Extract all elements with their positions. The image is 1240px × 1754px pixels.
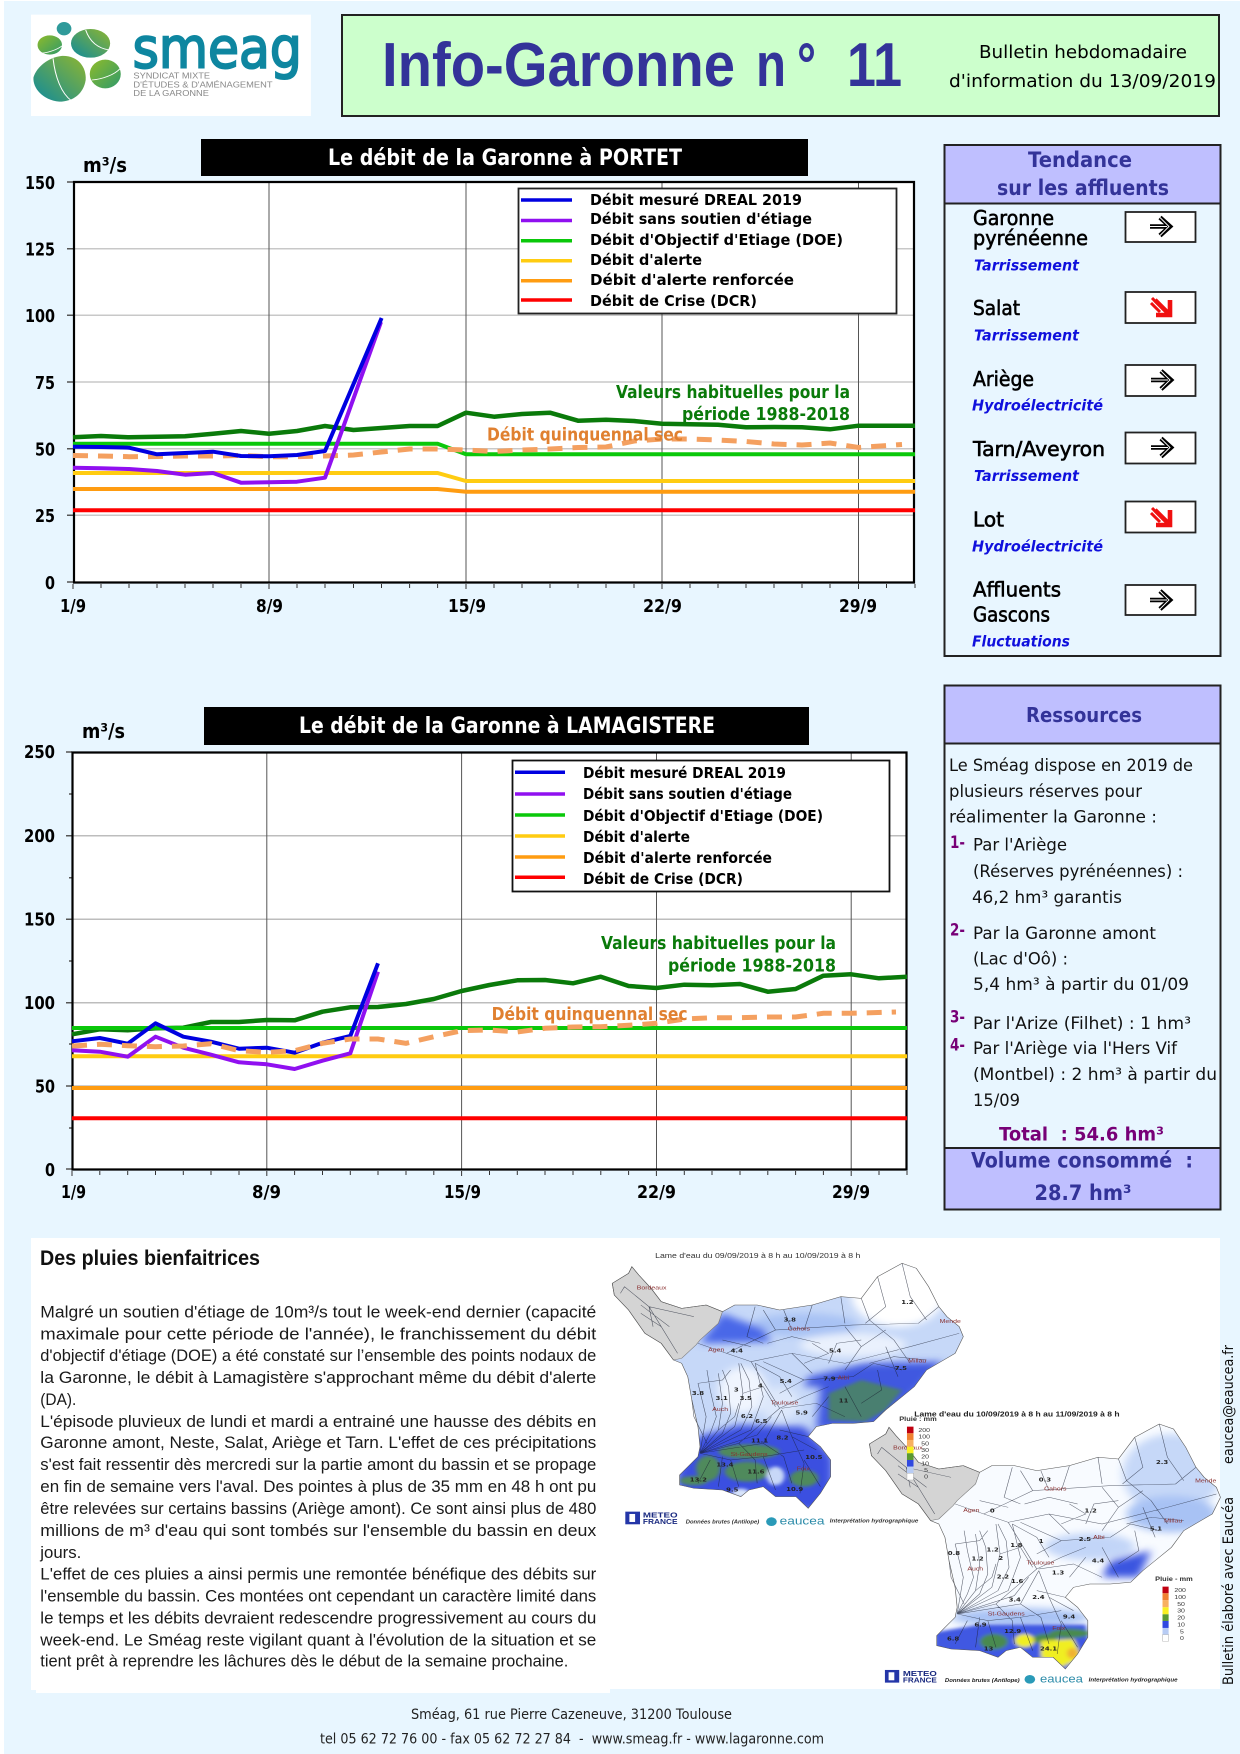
y axis labels: 50 xyxy=(35,1076,55,1098)
title: Info-Garonne xyxy=(382,31,735,100)
item 2: Par la Garonne amont xyxy=(973,924,1156,944)
x axis labels: 1/9 xyxy=(60,596,86,617)
map: 10/09 to 11/09: Auch xyxy=(967,1566,984,1572)
chart annotations: période 1988-2018 xyxy=(682,404,850,425)
chart title bar xyxy=(204,707,809,745)
map: 10/09 to 11/09: Lame d'eau du 10/09/2019 à 8 h au 11/09/2019 à 8 h xyxy=(914,1410,1120,1418)
article text xyxy=(39,1303,597,1671)
map: 09/09 to 10/09: 3.8 xyxy=(692,1391,705,1397)
chart title bar: Le débit de la Garonne à PORTET xyxy=(328,146,682,171)
rain legend, first map: Pluie : mm xyxy=(899,1415,937,1423)
header panel xyxy=(342,15,1219,116)
article text: le temps et les débits devraient redescendre progressivement au cours du xyxy=(40,1610,596,1628)
y axis labels: 200 xyxy=(24,826,55,847)
chart annotations: période 1988-2018 xyxy=(668,956,836,977)
map: 10/09 to 11/09: Millau xyxy=(1164,1518,1183,1524)
map credits: eaucea xyxy=(1040,1673,1083,1685)
x axis labels: 8/9 xyxy=(252,1182,281,1203)
map: 09/09 to 10/09: 10.5 xyxy=(805,1455,822,1461)
article text: Malgré un soutien d'étiage de 10m³/s tout le week-end dernier (capacité xyxy=(40,1303,596,1321)
y axis labels: 100 xyxy=(25,306,55,327)
line: débit quinquennal sec xyxy=(73,439,902,457)
y axis labels: 50 xyxy=(35,440,55,460)
x axis labels xyxy=(60,596,877,617)
intro text xyxy=(949,756,1193,828)
line: DOE xyxy=(73,444,915,454)
row: Salat: Salat xyxy=(973,296,1020,320)
maps: lames d'eau xyxy=(612,1252,1220,1685)
line: débit sans soutien xyxy=(73,322,381,483)
map: 09/09 to 10/09: 8.2 xyxy=(776,1435,789,1441)
map: 10/09 to 11/09: Mende xyxy=(1195,1478,1217,1484)
panel heading: sur les affluents xyxy=(997,176,1169,200)
row: Lot: Lot xyxy=(973,508,1004,532)
item 4: Par l'Ariège via l'Hers Vif xyxy=(973,1039,1178,1059)
line: débit de crise xyxy=(72,1116,907,1120)
line: débit quinquennal sec xyxy=(72,1012,896,1052)
chart annotations xyxy=(487,382,850,446)
map: 10/09 to 11/09: 1 xyxy=(1039,1538,1044,1545)
legend: Débit d'alerte renforcée xyxy=(590,271,794,289)
article text: tient prêt à reprendre les lâchures dès le début de la semaine prochaine. xyxy=(40,1653,568,1671)
rain legend, first map: 200 xyxy=(918,1428,930,1434)
map: 10/09 to 11/09: 2.2 xyxy=(997,1574,1009,1580)
row: Garonne pyrénéenne: Garonne xyxy=(973,206,1054,230)
map: 09/09 to 10/09: 3.1 xyxy=(716,1396,728,1402)
map: 09/09 to 10/09: 5.4 xyxy=(780,1379,793,1385)
map: 10/09 to 11/09: 3.4 xyxy=(1009,1597,1022,1603)
line: débit mesuré xyxy=(72,963,378,1053)
map credits xyxy=(625,1510,919,1527)
map: 10/09 to 11/09: 12.9 xyxy=(1004,1628,1021,1635)
map: 09/09 to 10/09: Millau xyxy=(908,1358,927,1364)
y axis labels: 150 xyxy=(24,910,55,930)
map: 09/09 to 10/09: 3.8 xyxy=(784,1317,797,1323)
row: Ariège: Ariège xyxy=(973,367,1034,391)
legend: Débit sans soutien d'étiage xyxy=(583,785,792,803)
map: 10/09 to 11/09: Toulouse xyxy=(1027,1560,1055,1566)
map: 10/09 to 11/09: 4.4 xyxy=(1092,1558,1105,1564)
item 4 xyxy=(950,1036,1217,1111)
article heading: Des pluies bienfaitrices xyxy=(40,1247,260,1270)
map: 10/09 to 11/09: 24.1 xyxy=(1040,1646,1057,1652)
row: Lot: Hydroélectricité xyxy=(972,538,1103,556)
logo subtitle xyxy=(133,72,273,98)
line: débit d'alerte xyxy=(72,1054,907,1058)
intro text: plusieurs réserves pour xyxy=(949,782,1142,802)
map credits: METEO xyxy=(903,1669,937,1678)
legend: Débit de Crise (DCR) xyxy=(583,870,743,888)
chart annotations: Débit quinquennal sec xyxy=(487,425,683,446)
map: 10/09 to 11/09: 0.8 xyxy=(948,1550,961,1557)
line: valeurs habituelles xyxy=(72,974,907,1034)
legend: Débit d'Objectif d'Etiage (DOE) xyxy=(590,231,843,249)
row: Salat xyxy=(973,292,1196,345)
article text: millions de m³ d'eau qui sont tombés sur l'ensemble du bassin en deux xyxy=(40,1522,597,1540)
y axis labels: 0 xyxy=(45,573,55,594)
rain legend, second map: 20 xyxy=(1177,1615,1185,1621)
panel heading: Tendance xyxy=(1028,148,1132,172)
x axis labels: 22/9 xyxy=(643,596,682,617)
map: 09/09 to 10/09: 11.6 xyxy=(747,1469,765,1475)
map: 09/09 to 10/09: Bordeaux xyxy=(637,1285,667,1291)
title: ° xyxy=(797,31,816,100)
row: Affluents Gascons: Gascons xyxy=(973,603,1050,627)
intro text: Le Sméag dispose en 2019 de xyxy=(949,756,1193,776)
map credits xyxy=(885,1669,1178,1685)
panel heading: Ressources xyxy=(1026,703,1142,727)
article text: la Garonne, le débit à Lamagistère s'approchant même du débit d'alerte xyxy=(40,1369,596,1387)
rain legend, second map: 30 xyxy=(1177,1608,1185,1614)
rain legend, first map: 20 xyxy=(921,1454,929,1460)
article text: L'effet de ces pluies a ainsi permis une remontée bénéfique des débits sur xyxy=(40,1566,597,1584)
line: valeurs habituelles xyxy=(73,413,915,437)
rain legend, first map: 5 xyxy=(924,1468,928,1474)
item 2: 2- xyxy=(950,920,965,940)
logo wordmark: smeag xyxy=(133,16,302,81)
chart title bar xyxy=(201,139,808,176)
map: 09/09 to 10/09: Foix xyxy=(797,1466,811,1472)
y axis unit: m³/s xyxy=(83,153,127,177)
row: Ariège xyxy=(972,365,1196,415)
chart annotations: Valeurs habituelles pour la xyxy=(601,933,836,954)
item 4: (Montbel) : 2 hm³ à partir du xyxy=(973,1065,1217,1085)
x axis labels: 15/9 xyxy=(448,596,486,617)
map: 09/09 to 10/09: 6.2 xyxy=(741,1414,753,1420)
map: 10/09 to 11/09: 0 xyxy=(990,1508,995,1514)
line: débit sans soutien xyxy=(72,972,378,1069)
map: 10/09 to 11/09: 1.2 xyxy=(971,1556,984,1562)
plot area xyxy=(66,752,907,1176)
logo subtitle: DE LA GARONNE xyxy=(133,89,209,98)
x axis labels: 8/9 xyxy=(256,596,283,617)
item 1: 46,2 hm³ garantis xyxy=(972,888,1122,908)
article text: maximale pour cette période de l'année), le franchissement du débit xyxy=(40,1325,597,1343)
item 2 xyxy=(950,920,1189,995)
map: 10/09 to 11/09: 9.4 xyxy=(1063,1614,1076,1620)
legend: Débit mesuré DREAL 2019 xyxy=(583,764,786,782)
legend: Débit de Crise (DCR) xyxy=(590,292,757,310)
article text: L'épisode pluvieux de lundi et mardi a entrainé une hausse des débits en xyxy=(40,1413,596,1431)
article text: week-end. Le Sméag reste vigilant quant à l'évolution de la situation et se xyxy=(39,1632,596,1650)
item 2: 5,4 hm³ à partir du 01/09 xyxy=(973,975,1189,995)
map credits: Interprétation hydrographique xyxy=(830,1519,919,1524)
map: 09/09 to 10/09: Agen xyxy=(708,1347,725,1353)
x axis labels: 15/9 xyxy=(444,1182,481,1203)
map: 10/09 to 11/09: 6.9 xyxy=(974,1622,987,1628)
item 2: (Lac d'Oô) : xyxy=(973,950,1068,970)
vertical credit: eaucea email: eaucea@eaucea.fr xyxy=(1221,1345,1237,1464)
map: 09/09 to 10/09: 9.5 xyxy=(726,1487,738,1493)
map: 09/09 to 10/09: 11 xyxy=(839,1398,848,1404)
legend: Débit d'alerte xyxy=(583,828,690,846)
rain legend, first map xyxy=(899,1415,937,1480)
map: 10/09 to 11/09: 2.5 xyxy=(1079,1536,1091,1543)
row: Affluents Gascons: Affluents xyxy=(973,578,1061,602)
y axis labels xyxy=(25,173,55,594)
rain legend, second map: 50 xyxy=(1177,1601,1185,1608)
map: 09/09 to 10/09: 1.2 xyxy=(901,1300,914,1306)
row: Lot xyxy=(972,502,1196,556)
rain legend, second map: 5 xyxy=(1180,1629,1184,1635)
y axis labels: 0 xyxy=(45,1160,55,1181)
map credits: Données brutes (Antilope) xyxy=(686,1520,759,1525)
x axis labels xyxy=(61,1182,870,1203)
x axis labels: 22/9 xyxy=(637,1182,676,1203)
map: 10/09 to 11/09: Cahors xyxy=(1044,1486,1066,1492)
row: Garonne pyrénéenne: pyrénéenne xyxy=(973,226,1088,250)
legend: Débit d'alerte xyxy=(590,251,702,269)
map: 09/09 to 10/09: 3 xyxy=(734,1387,739,1393)
map: 10/09 to 11/09: 5.1 xyxy=(1150,1526,1162,1532)
map: 09/09 to 10/09: Mende xyxy=(940,1319,961,1325)
map: 10/09 to 11/09: Agen xyxy=(963,1507,980,1514)
map: 09/09 to 10/09: 10.9 xyxy=(786,1487,803,1493)
subtitle: Bulletin hebdomadaire xyxy=(979,42,1187,63)
map: 09/09 to 10/09: 4 xyxy=(758,1383,763,1389)
map: 09/09 to 10/09: 11.1 xyxy=(751,1438,768,1444)
item 1: (Réserves pyrénéennes) : xyxy=(973,862,1183,882)
chart annotations xyxy=(492,933,836,1025)
map: 10/09 to 11/09: Albi xyxy=(1093,1534,1105,1541)
item 4: 15/09 xyxy=(973,1091,1020,1111)
map: 09/09 to 10/09: 13.4 xyxy=(716,1462,734,1468)
map: 10/09 to 11/09: 1.2 xyxy=(1085,1508,1097,1514)
article text: jours. xyxy=(39,1544,81,1562)
subtitle: d'information du 13/09/2019 xyxy=(949,71,1216,92)
row: Tarn/Aveyron: Tarrissement xyxy=(974,467,1080,485)
map credits: FRANCE xyxy=(903,1675,937,1684)
map: 10/09 to 11/09: 1.6 xyxy=(1011,1578,1024,1585)
y axis labels: 250 xyxy=(24,742,55,763)
map credits: Interprétation hydrographique xyxy=(1089,1678,1178,1683)
volume consommé xyxy=(944,1148,1221,1208)
map: 09/09 to 10/09: Auch xyxy=(712,1407,729,1413)
logo subtitle: SYNDICAT MIXTE xyxy=(133,72,210,80)
map credits: METEO xyxy=(643,1510,678,1519)
rain legend, second map: 200 xyxy=(1174,1587,1186,1594)
article text: Garonne amont, Neste, Salat, Ariège et Tarn. L'effet de ces précipitations xyxy=(40,1434,596,1452)
line: débit d'alerte renforcée xyxy=(73,489,915,492)
map credits: eaucea xyxy=(780,1515,825,1527)
logo subtitle: D'ÉTUDES & D'AMÉNAGEMENT xyxy=(133,80,273,89)
title: 11 xyxy=(847,31,902,100)
legend: Débit mesuré DREAL 2019 xyxy=(590,191,802,209)
x axis labels: 1/9 xyxy=(61,1182,86,1203)
rain legend, second map: Pluie - mm xyxy=(1155,1575,1193,1583)
legend: Débit d'alerte renforcée xyxy=(583,849,772,867)
item 4: 4- xyxy=(950,1036,965,1056)
map: 10/09 to 11/09: 1.3 xyxy=(1052,1570,1064,1576)
vertical credit: bulletin: Bulletin élaboré avec Eaucéa xyxy=(1221,1497,1237,1685)
item 3: Par l'Arize (Filhet) : 1 hm³ xyxy=(973,1014,1191,1034)
panel: text and maps background xyxy=(31,1238,1220,1693)
map: 09/09 to 10/09: 7.5 xyxy=(895,1366,907,1372)
icon: pebbles xyxy=(33,22,121,102)
rain legend, second map: 100 xyxy=(1174,1594,1186,1601)
rain legend, first map: 100 xyxy=(918,1434,930,1440)
map credits: Données brutes (Antilope) xyxy=(945,1678,1020,1684)
y axis labels: 100 xyxy=(24,993,55,1014)
chart annotations: Valeurs habituelles pour la xyxy=(616,382,850,403)
map credits: FRANCE xyxy=(643,1517,678,1526)
panel heading xyxy=(944,146,1221,204)
y axis labels: 25 xyxy=(35,506,55,527)
x axis labels: 29/9 xyxy=(839,596,877,617)
y axis unit: m³/s xyxy=(82,719,125,743)
map: 10/09 to 11/09 xyxy=(869,1410,1220,1685)
rain legend, second map: 10 xyxy=(1177,1622,1185,1628)
row: Affluents Gascons: Fluctuations xyxy=(972,632,1070,650)
map: 10/09 to 11/09: 13 xyxy=(984,1646,993,1652)
map: 09/09 to 10/09: Lame d'eau du 09/09/2019 à 8 h au 10/09/2019 à 8 h xyxy=(655,1252,861,1260)
map: 10/09 to 11/09: 1.2 xyxy=(987,1547,999,1553)
y axis labels: 75 xyxy=(35,373,55,394)
row: Garonne pyrénéenne: Tarrissement xyxy=(974,256,1080,274)
subtitle xyxy=(949,42,1216,92)
rain legend, second map xyxy=(1155,1575,1193,1642)
rain legend, first map: 0 xyxy=(924,1474,928,1480)
rain legend, first map: 30 xyxy=(921,1448,929,1454)
y axis labels: 150 xyxy=(25,173,55,194)
footer contacts: tel 05 62 72 76 00 - fax 05 62 72 27 84 - www.smeag.fr - www.lagaronne.com xyxy=(320,1732,824,1748)
map: 09/09 to 10/09: 5.9 xyxy=(796,1410,808,1416)
volume consommé: Volume consommé : xyxy=(971,1148,1193,1172)
y axis labels: 125 xyxy=(25,240,55,260)
map: 09/09 to 10/09: 4.4 xyxy=(731,1348,744,1354)
map: 09/09 to 10/09 xyxy=(612,1252,963,1527)
row: Salat: Tarrissement xyxy=(974,327,1080,345)
legend xyxy=(518,188,896,314)
map: 10/09 to 11/09: 0.3 xyxy=(1039,1477,1051,1483)
map: 09/09 to 10/09: Cahors xyxy=(788,1326,810,1332)
item 3 xyxy=(950,1008,1191,1034)
chart: débit à Portet xyxy=(25,139,915,617)
line: DOE xyxy=(72,1026,907,1030)
rain legend, second map: 0 xyxy=(1180,1635,1184,1642)
article text: être relevées sur certains bassins (Ariège amont). Ce sont ainsi plus de 480 xyxy=(40,1500,596,1518)
legend xyxy=(512,760,890,892)
row: Garonne pyrénéenne xyxy=(973,206,1196,274)
map: 10/09 to 11/09: 6.8 xyxy=(947,1636,960,1642)
row: Ariège: Hydroélectricité xyxy=(972,397,1103,415)
map: 09/09 to 10/09: Albi xyxy=(838,1375,849,1381)
article text: en fin de semaine vers l'aval. Des pointes à plus de 35 mm en 48 h ont pu xyxy=(40,1478,596,1496)
map: 10/09 to 11/09: St-Gaudens xyxy=(988,1611,1025,1617)
logo: smeag xyxy=(31,15,311,116)
line: débit d'alerte xyxy=(73,473,915,481)
map: 09/09 to 10/09: 5.4 xyxy=(829,1348,842,1354)
chart title bar: Le débit de la Garonne à LAMAGISTERE xyxy=(299,714,715,739)
plot area xyxy=(67,182,915,589)
item 1: 1- xyxy=(950,833,965,853)
rain legend, first map: 10 xyxy=(921,1461,929,1467)
map: 10/09 to 11/09: Foix xyxy=(1052,1625,1066,1632)
footer address: Sméag, 61 rue Pierre Cazeneuve, 31200 Toulouse xyxy=(411,1707,732,1723)
panel heading xyxy=(944,686,1221,744)
map: 09/09 to 10/09: Toulouse xyxy=(771,1400,799,1406)
volume consommé: 28.7 hm³ xyxy=(1034,1181,1132,1205)
title: n xyxy=(756,31,786,100)
row: Tarn/Aveyron xyxy=(972,432,1196,485)
chart: débit à Lamagistère xyxy=(24,707,907,1203)
row: Tarn/Aveyron: Tarn/Aveyron xyxy=(972,437,1105,461)
map: 09/09 to 10/09: 3.5 xyxy=(740,1396,752,1402)
article text: d'objectif d'étiage (DOE) a été constaté sur l’ensemble des points nodaux de xyxy=(40,1347,596,1365)
y axis labels xyxy=(24,742,55,1181)
map: 09/09 to 10/09: 13.2 xyxy=(690,1477,707,1483)
x axis labels: 29/9 xyxy=(832,1182,870,1203)
legend: Débit d'Objectif d'Etiage (DOE) xyxy=(583,807,823,825)
map: 09/09 to 10/09: 7.9 xyxy=(823,1376,836,1382)
map: 10/09 to 11/09: 1.8 xyxy=(1010,1542,1023,1549)
intro text: réalimenter la Garonne : xyxy=(949,808,1157,828)
map: 10/09 to 11/09: 2 xyxy=(998,1555,1003,1562)
panel: tendance sur les affluents xyxy=(944,145,1221,656)
line: débit d'alerte renforcée xyxy=(72,1086,907,1090)
item 3: 3- xyxy=(950,1008,965,1028)
legend: Débit sans soutien d'étiage xyxy=(590,210,812,228)
article text: s'est fait ressentir dès mercredi sur la partie amont du bassin et se propage xyxy=(40,1456,596,1474)
map: 09/09 to 10/09: 6.5 xyxy=(755,1419,767,1425)
map: 10/09 to 11/09: Bordeaux xyxy=(893,1445,924,1451)
map: 10/09 to 11/09: 2.3 xyxy=(1156,1460,1168,1466)
row: Affluents Gascons xyxy=(972,578,1196,650)
item 1 xyxy=(950,833,1183,908)
map: 10/09 to 11/09: 2.4 xyxy=(1032,1594,1045,1601)
line: débit de crise xyxy=(73,508,915,512)
article text: (DA). xyxy=(40,1391,76,1409)
map: 09/09 to 10/09: St-Gaudens xyxy=(731,1452,768,1458)
chart annotations: Débit quinquennal sec xyxy=(492,1004,688,1025)
item 1: Par l'Ariège xyxy=(973,836,1067,856)
total: Total : 54.6 hm³ xyxy=(999,1124,1164,1146)
line: débit mesuré xyxy=(73,318,382,456)
rain legend, first map: 50 xyxy=(921,1441,929,1447)
panel: ressources xyxy=(944,686,1221,1210)
article text: l'ensemble du bassin. Ces montées ont cependant un caractère limité dans xyxy=(40,1588,596,1606)
